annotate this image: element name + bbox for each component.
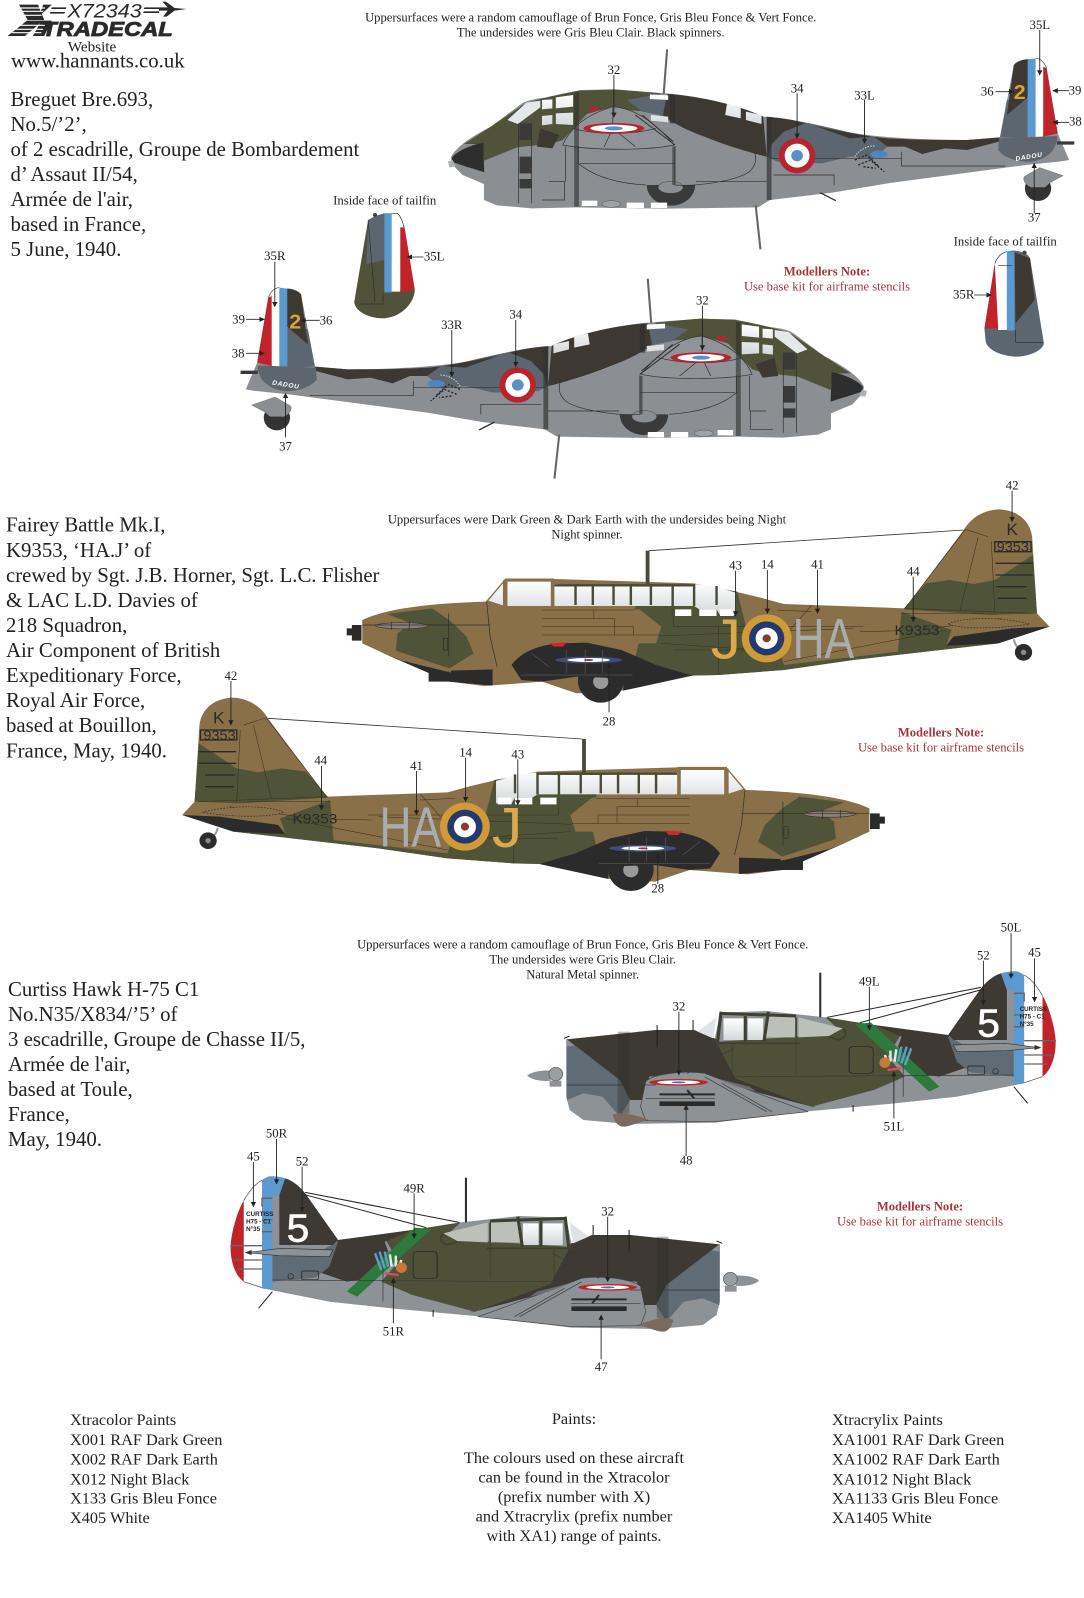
code letters HA: HA (793, 608, 855, 671)
rudder data: N°35 (1020, 1021, 1034, 1028)
paints note: can be found in the Xtracolor (478, 1468, 670, 1487)
text block: Curtiss Hawk description: based at Toule, (8, 1078, 133, 1101)
paints note: and Xtracrylix (prefix number (476, 1507, 673, 1526)
icon: jet (143, 2, 187, 17)
paint list: Xtracrylix (832, 1410, 1004, 1527)
callouts: lower Hawk (247, 1127, 614, 1374)
paint list: Xtracrylix: XA1405 White (832, 1508, 932, 1527)
rudder data (246, 1211, 273, 1233)
paints note: (prefix number with X) (498, 1487, 650, 1506)
text block: Breguet colour note: The undersides were Gris Bleu Clair. Black spinners. (457, 26, 724, 40)
text block: Battle colour note: Uppersurfaces were Dark Green & Dark Earth with the undersides being Night (388, 512, 787, 526)
fin number 5: 5 (287, 1207, 309, 1250)
callouts: lower Breguet (232, 249, 709, 453)
text block: Breguet colour note (365, 11, 816, 40)
callouts: upper Hawk (672, 921, 1041, 1167)
text block: Battle colour note (388, 512, 787, 541)
callouts: upper Breguet: 34 (791, 82, 804, 95)
code letter J: J (492, 797, 522, 860)
text block: Curtiss Hawk description (8, 978, 305, 1151)
callouts: lower Hawk: 51R (383, 1325, 405, 1339)
website label: Website (68, 39, 117, 56)
code letters HA: HA (380, 796, 441, 859)
text block: Curtiss Hawk description: Curtiss Hawk H-75 C1 (8, 978, 199, 1001)
callouts: upper Hawk: 52 (977, 949, 990, 962)
note: Modellers note 2: Modellers Note: (898, 725, 984, 739)
paint list: Xtracolor: X133 Gris Bleu Fonce (70, 1488, 217, 1507)
paint list: Xtracolor (70, 1410, 222, 1527)
callouts: upper Battle: 41 (811, 558, 824, 572)
fin serial: K (213, 709, 225, 727)
text block: Breguet description: of 2 escadrille, Groupe de Bombardement (10, 138, 360, 161)
logo X mark (8, 5, 66, 36)
paint list: Xtracrylix: XA1012 Night Black (832, 1469, 972, 1488)
rudder data: CURTISS (246, 1211, 273, 1218)
text block: Hawk colour note: Uppersurfaces were a random camouflage of Brun Fonce, Gris Bleu Fonce & Vert Fonce. (357, 937, 808, 951)
paint list: Xtracrylix: XA1133 Gris Bleu Fonce (832, 1488, 998, 1507)
fin number 2: 2 (289, 311, 301, 333)
callouts: upper Breguet: 36 (981, 85, 994, 99)
serial: K9353 (292, 812, 337, 827)
callouts: upper Breguet: 38 (1069, 115, 1082, 129)
text block: Fairey Battle description: crewed by Sgt. J.B. Horner, Sgt. L.C. Flisher (6, 564, 380, 587)
tail name: DADOU (1015, 152, 1043, 163)
text block: Fairey Battle description: Air Component of British (6, 639, 221, 662)
text block: Breguet description: d’ Assaut II/54, (10, 163, 138, 186)
serial: K9353 (895, 623, 940, 639)
text block: Curtiss Hawk description: No.N35/X834/’5’ of (8, 1003, 178, 1026)
text block: Breguet colour note: Uppersurfaces were a random camouflage of Brun Fonce, Gris Bleu Fonce & Vert Fonce. (365, 11, 816, 25)
callouts: upper Hawk: 45 (1028, 946, 1041, 959)
paints note (464, 1409, 685, 1545)
text block: Battle colour note: Night spinner. (551, 527, 623, 541)
text block: Curtiss Hawk description: May, 1940. (8, 1128, 102, 1151)
text block: Fairey Battle description: 218 Squadron, (6, 614, 127, 637)
text block: Breguet description: Breguet Bre.693, (10, 88, 153, 111)
text block: Fairey Battle description: based at Bouillon, (6, 714, 157, 737)
paint list: Xtracrylix: XA1001 RAF Dark Green (832, 1430, 1004, 1449)
callouts: upper Hawk: 51L (884, 1120, 904, 1134)
callouts: upper Hawk: 49L (859, 975, 880, 989)
inset: inside face of tailfin, right (953, 235, 1058, 357)
callouts: upper Battle: 43 (729, 559, 742, 572)
note: Modellers note 3 (837, 1200, 1003, 1229)
callouts: upper Breguet: 35L (1029, 18, 1050, 32)
paint list: Xtracolor: X001 RAF Dark Green (70, 1430, 222, 1449)
logo: Xtradecal X72343 (8, 1, 187, 41)
callouts: upper Breguet: 39 (1069, 84, 1081, 97)
text block: Fairey Battle description (6, 514, 380, 762)
text block: Fairey Battle description: & LAC L.D. Davies of (6, 589, 198, 612)
aircraft: Breguet Bre.693 left side (448, 18, 1082, 249)
callouts: upper Breguet: 33L (854, 89, 875, 102)
code letter J: J (711, 609, 741, 671)
callouts: lower Breguet: 36 (320, 314, 332, 328)
text block: Fairey Battle description: France, May, 1940. (6, 739, 167, 762)
paint list: Xtracolor: Xtracolor Paints (70, 1410, 176, 1429)
callouts: lower Breguet: 34 (509, 308, 523, 322)
callouts: upper Breguet (608, 18, 1082, 225)
aircraft: Breguet Bre.693 right side (232, 249, 867, 479)
text block: Curtiss Hawk description: France, (8, 1103, 70, 1126)
text block: Breguet description: No.5/’2’, (10, 113, 87, 136)
fin number 5: 5 (977, 1002, 1000, 1046)
rudder data: H75 - C1 (246, 1218, 272, 1225)
rudder data: N°35 (246, 1226, 261, 1233)
inset: inside face of tailfin, left: Inside face of tailfin (333, 194, 437, 208)
logo code text: X72343 (66, 1, 142, 22)
callouts: lower Battle: 44 (314, 754, 328, 768)
text block: Fairey Battle description: Expeditionary Force, (6, 664, 182, 687)
text block: Fairey Battle description: Fairey Battle Mk.I, (6, 514, 165, 537)
callouts: upper Hawk: 32 (672, 1000, 685, 1014)
callouts: lower Battle: 42 (225, 669, 237, 683)
inset: inside face of tailfin, left (333, 194, 444, 318)
note: Modellers note 1 (744, 265, 910, 294)
text block: Breguet description (10, 88, 360, 261)
paint list: Xtracolor: X012 Night Black (70, 1469, 190, 1488)
callouts: lower Breguet: 39 (232, 313, 245, 327)
text block: Hawk colour note (357, 937, 808, 981)
text block: Hawk colour note: Natural Metal spinner. (526, 967, 639, 981)
text block: Breguet description: Armée de l'air, (10, 188, 133, 211)
logo wordmark: TRADECAL (42, 18, 173, 41)
callouts: lower Battle: 28 (651, 882, 664, 895)
rudder data: H75 - C1 (1020, 1013, 1045, 1020)
callouts: lower Breguet: 38 (232, 347, 245, 361)
paint list: Xtracolor: X405 White (70, 1508, 150, 1527)
paints note: The colours used on these aircraft (464, 1448, 685, 1467)
callouts: upper Battle (603, 479, 1018, 728)
callouts: upper Breguet: 37 (1028, 211, 1041, 225)
note: Modellers note 2 (858, 725, 1024, 755)
rudder data: CURTISS (1020, 1006, 1047, 1013)
note: Modellers note 1: Modellers Note: (784, 265, 870, 279)
note: Modellers note 3: Use base kit for airframe stencils (837, 1215, 1003, 1229)
callouts: lower Hawk: 45 (247, 1150, 260, 1164)
paints note: Paints: (552, 1409, 596, 1428)
callouts: lower Hawk: 52 (296, 1155, 308, 1169)
callouts: upper Hawk: 50L (1001, 921, 1021, 935)
callouts: upper Battle: 42 (1006, 479, 1018, 492)
text block: Hawk colour note: The undersides were Gris Bleu Clair. (489, 952, 676, 966)
paints note: with XA1) range of paints. (487, 1526, 661, 1545)
callouts: lower Hawk: 50R (266, 1127, 288, 1141)
aircraft: Fairey Battle right side (347, 479, 1049, 728)
inset: inside face of tailfin, left: 35L (424, 250, 444, 264)
callouts: lower Breguet: 32 (696, 294, 709, 308)
fin serial (997, 520, 1029, 555)
fin serial: 9353 (203, 728, 236, 744)
callouts: lower Battle: 43 (511, 748, 524, 761)
website url: www.hannants.co.uk (11, 50, 185, 73)
fin serial: K (1006, 520, 1019, 539)
tail name: DADOU (272, 380, 300, 391)
callouts: upper Battle: 28 (603, 715, 615, 728)
text block: Breguet description: based in France, (10, 213, 146, 236)
callouts: lower Breguet: 37 (279, 440, 292, 453)
fin number 2: 2 (1014, 81, 1026, 104)
aircraft: Curtiss Hawk left side (527, 921, 1056, 1167)
callouts: upper Battle: 14 (761, 558, 774, 572)
text block: Fairey Battle description: Royal Air Force, (6, 689, 145, 712)
note: Modellers note 1: Use base kit for airframe stencils (744, 280, 910, 294)
callouts: lower Breguet: 35R (264, 249, 286, 263)
callouts: lower Breguet: 33R (441, 318, 463, 332)
callouts: lower Hawk: 49R (403, 1182, 425, 1196)
callouts: lower Battle (225, 669, 664, 895)
paint list: Xtracolor: X002 RAF Dark Earth (70, 1449, 218, 1468)
text block: Curtiss Hawk description: 3 escadrille, Groupe de Chasse II/5, (8, 1028, 305, 1051)
inset: inside face of tailfin, right: Inside face of tailfin (954, 235, 1058, 249)
paint list: Xtracrylix: XA1002 RAF Dark Earth (832, 1449, 1000, 1468)
callouts: lower Battle: 14 (459, 746, 473, 760)
text block: Fairey Battle description: K9353, ‘HA.J’ of (6, 539, 151, 562)
aircraft: Curtiss Hawk right side (230, 1127, 759, 1374)
text block: Breguet description: 5 June, 1940. (10, 238, 121, 261)
callouts: lower Hawk: 47 (595, 1360, 607, 1374)
inset: inside face of tailfin, right: 35R (953, 288, 975, 302)
fin serial: 9353 (997, 540, 1029, 555)
note: Modellers note 3: Modellers Note: (877, 1200, 963, 1214)
fin serial (203, 709, 236, 744)
aircraft: Fairey Battle left side (182, 669, 885, 895)
callouts: lower Hawk: 32 (601, 1205, 614, 1219)
text block: Curtiss Hawk description: Armée de l'air, (8, 1053, 130, 1076)
paint list: Xtracrylix: Xtracrylix Paints (832, 1410, 943, 1429)
note: Modellers note 2: Use base kit for airframe stencils (858, 741, 1024, 755)
callouts: upper Battle: 44 (907, 565, 920, 579)
callouts: lower Battle: 41 (410, 759, 423, 773)
callouts: upper Breguet: 32 (608, 63, 620, 77)
rudder data (1020, 1006, 1047, 1028)
callouts: upper Hawk: 48 (680, 1154, 693, 1167)
